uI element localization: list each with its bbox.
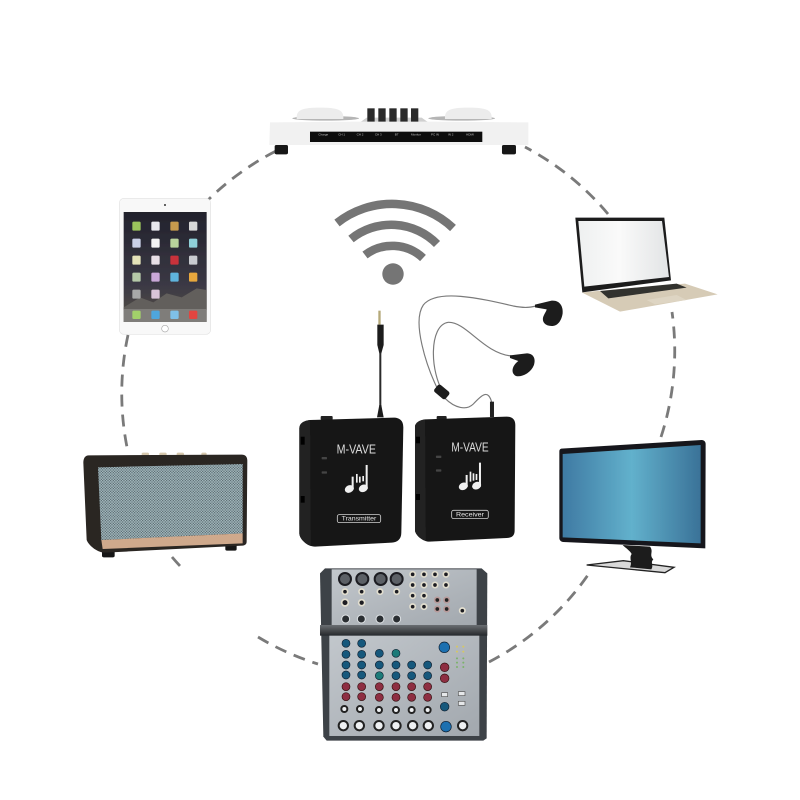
grille [98, 464, 243, 540]
rear port panel: CH 1 [338, 133, 345, 137]
tablet body [119, 198, 211, 334]
monitor screen [563, 445, 701, 543]
master blue knobs [439, 642, 451, 732]
keyboard [600, 284, 687, 298]
rear port panel: CH 3 [375, 133, 382, 137]
side ridge [299, 420, 311, 546]
device: receiver [415, 416, 515, 542]
cable boot [377, 405, 384, 417]
right platter [428, 108, 495, 121]
blue knobs [342, 639, 449, 711]
transmitter label: Transmitter [342, 517, 376, 523]
rear port panel [310, 132, 482, 142]
earphones and cables [419, 296, 563, 417]
receiver label: Receiver [456, 513, 484, 519]
feet [275, 145, 516, 154]
audio plug tip [378, 311, 381, 325]
status lights [322, 457, 327, 474]
transmitter case [299, 418, 403, 547]
white knobs [339, 706, 467, 730]
mixer chassis [320, 568, 487, 741]
icon: wifi signal [337, 204, 453, 285]
top switch [437, 416, 447, 420]
device: DJ controller [269, 108, 528, 154]
cable clip [433, 384, 450, 400]
rear port panel: Monitor [411, 133, 421, 137]
mountain wallpaper [124, 288, 207, 310]
jacks [342, 572, 465, 613]
trackpad [647, 295, 687, 304]
gain knobs [342, 615, 401, 623]
device: audio mixer [320, 568, 487, 741]
laptop screen [578, 221, 669, 287]
red knobs [342, 663, 449, 701]
deck body [269, 122, 528, 145]
top earbud [535, 301, 563, 326]
receiver case [415, 417, 515, 542]
plug barrel [377, 325, 384, 353]
XLR inputs [339, 573, 403, 585]
device: transmitter [299, 311, 403, 547]
device: tablet [119, 198, 211, 334]
feet [102, 544, 237, 557]
stand neck [623, 545, 653, 569]
brand name: M-VAVE [337, 441, 376, 456]
lower earbud [510, 353, 535, 376]
monitor bezel [559, 440, 706, 548]
brand name: M-VAVE [451, 441, 489, 455]
bottom panel [329, 635, 479, 736]
top switch [321, 416, 333, 420]
rear port panel: Charge [318, 133, 329, 137]
device: monitor [559, 440, 706, 573]
tablet screen [124, 212, 207, 322]
divider band [320, 625, 487, 636]
tan strip [101, 533, 243, 549]
top controls [142, 453, 207, 457]
antenna cable [379, 353, 381, 406]
rear port panel: HDMI [466, 133, 474, 137]
centre wedge [360, 118, 428, 122]
left platter [292, 108, 359, 121]
pad buttons [367, 108, 418, 122]
cabinet [83, 455, 247, 553]
device: speaker [83, 453, 247, 557]
LED meter [456, 646, 464, 668]
rear port panel: PC IN [431, 133, 439, 137]
status lights [436, 456, 441, 472]
RCA sockets [435, 597, 449, 612]
music note logo [458, 463, 482, 492]
rear port panel: CH 2 [357, 133, 364, 137]
side controls [301, 437, 305, 503]
transmitter label [337, 515, 381, 523]
receiver plug [490, 402, 494, 417]
side ridge [415, 419, 426, 541]
stand base [587, 561, 674, 573]
side controls [416, 437, 420, 500]
earphone wires [419, 296, 537, 408]
dashed connection ring [122, 147, 675, 664]
rear port panel: BT [395, 133, 399, 137]
music note logo [344, 465, 369, 494]
laptop base [582, 284, 718, 312]
device: laptop [575, 218, 718, 312]
rear port panel: IN 2 [448, 133, 454, 137]
camera [164, 204, 166, 206]
top panel [332, 569, 477, 625]
dock [124, 309, 207, 322]
laptop lid [575, 218, 671, 292]
switches [442, 692, 465, 705]
home button [162, 325, 168, 332]
app icons [132, 222, 197, 319]
